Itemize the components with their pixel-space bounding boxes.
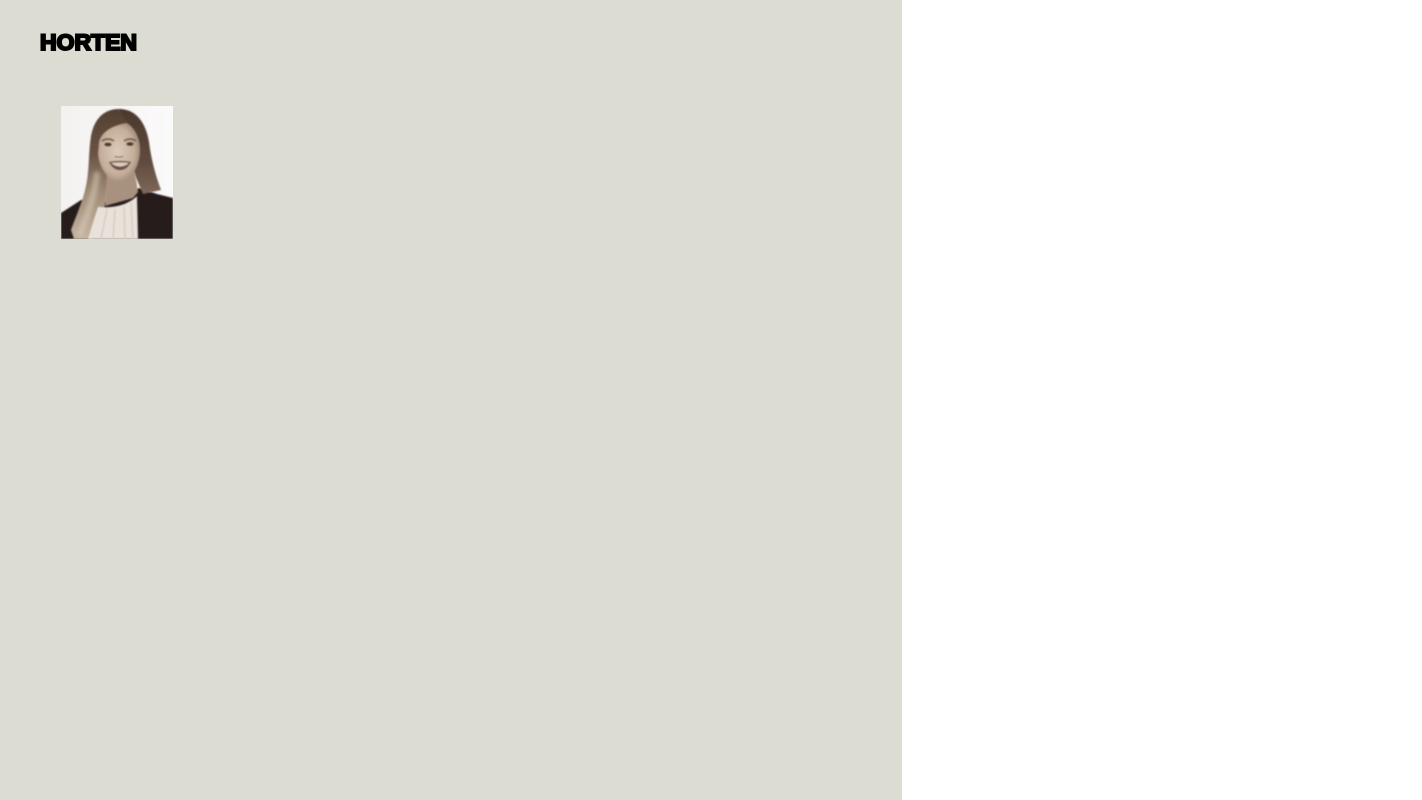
eyes and brows [102,139,136,146]
jacket [61,188,173,239]
hair: left side [71,109,127,239]
blouse [88,196,138,239]
nose shadow [115,156,123,158]
blouse folds [101,203,133,239]
panel: beige background [0,0,902,800]
hair: right side [119,109,161,194]
hair highlight [79,172,97,236]
smile [109,161,131,170]
studio backdrop [61,106,173,239]
portrait photo [61,106,173,239]
face [98,123,140,182]
logo: Horten wordmark: HORTEN [40,30,137,55]
neck [105,172,138,206]
